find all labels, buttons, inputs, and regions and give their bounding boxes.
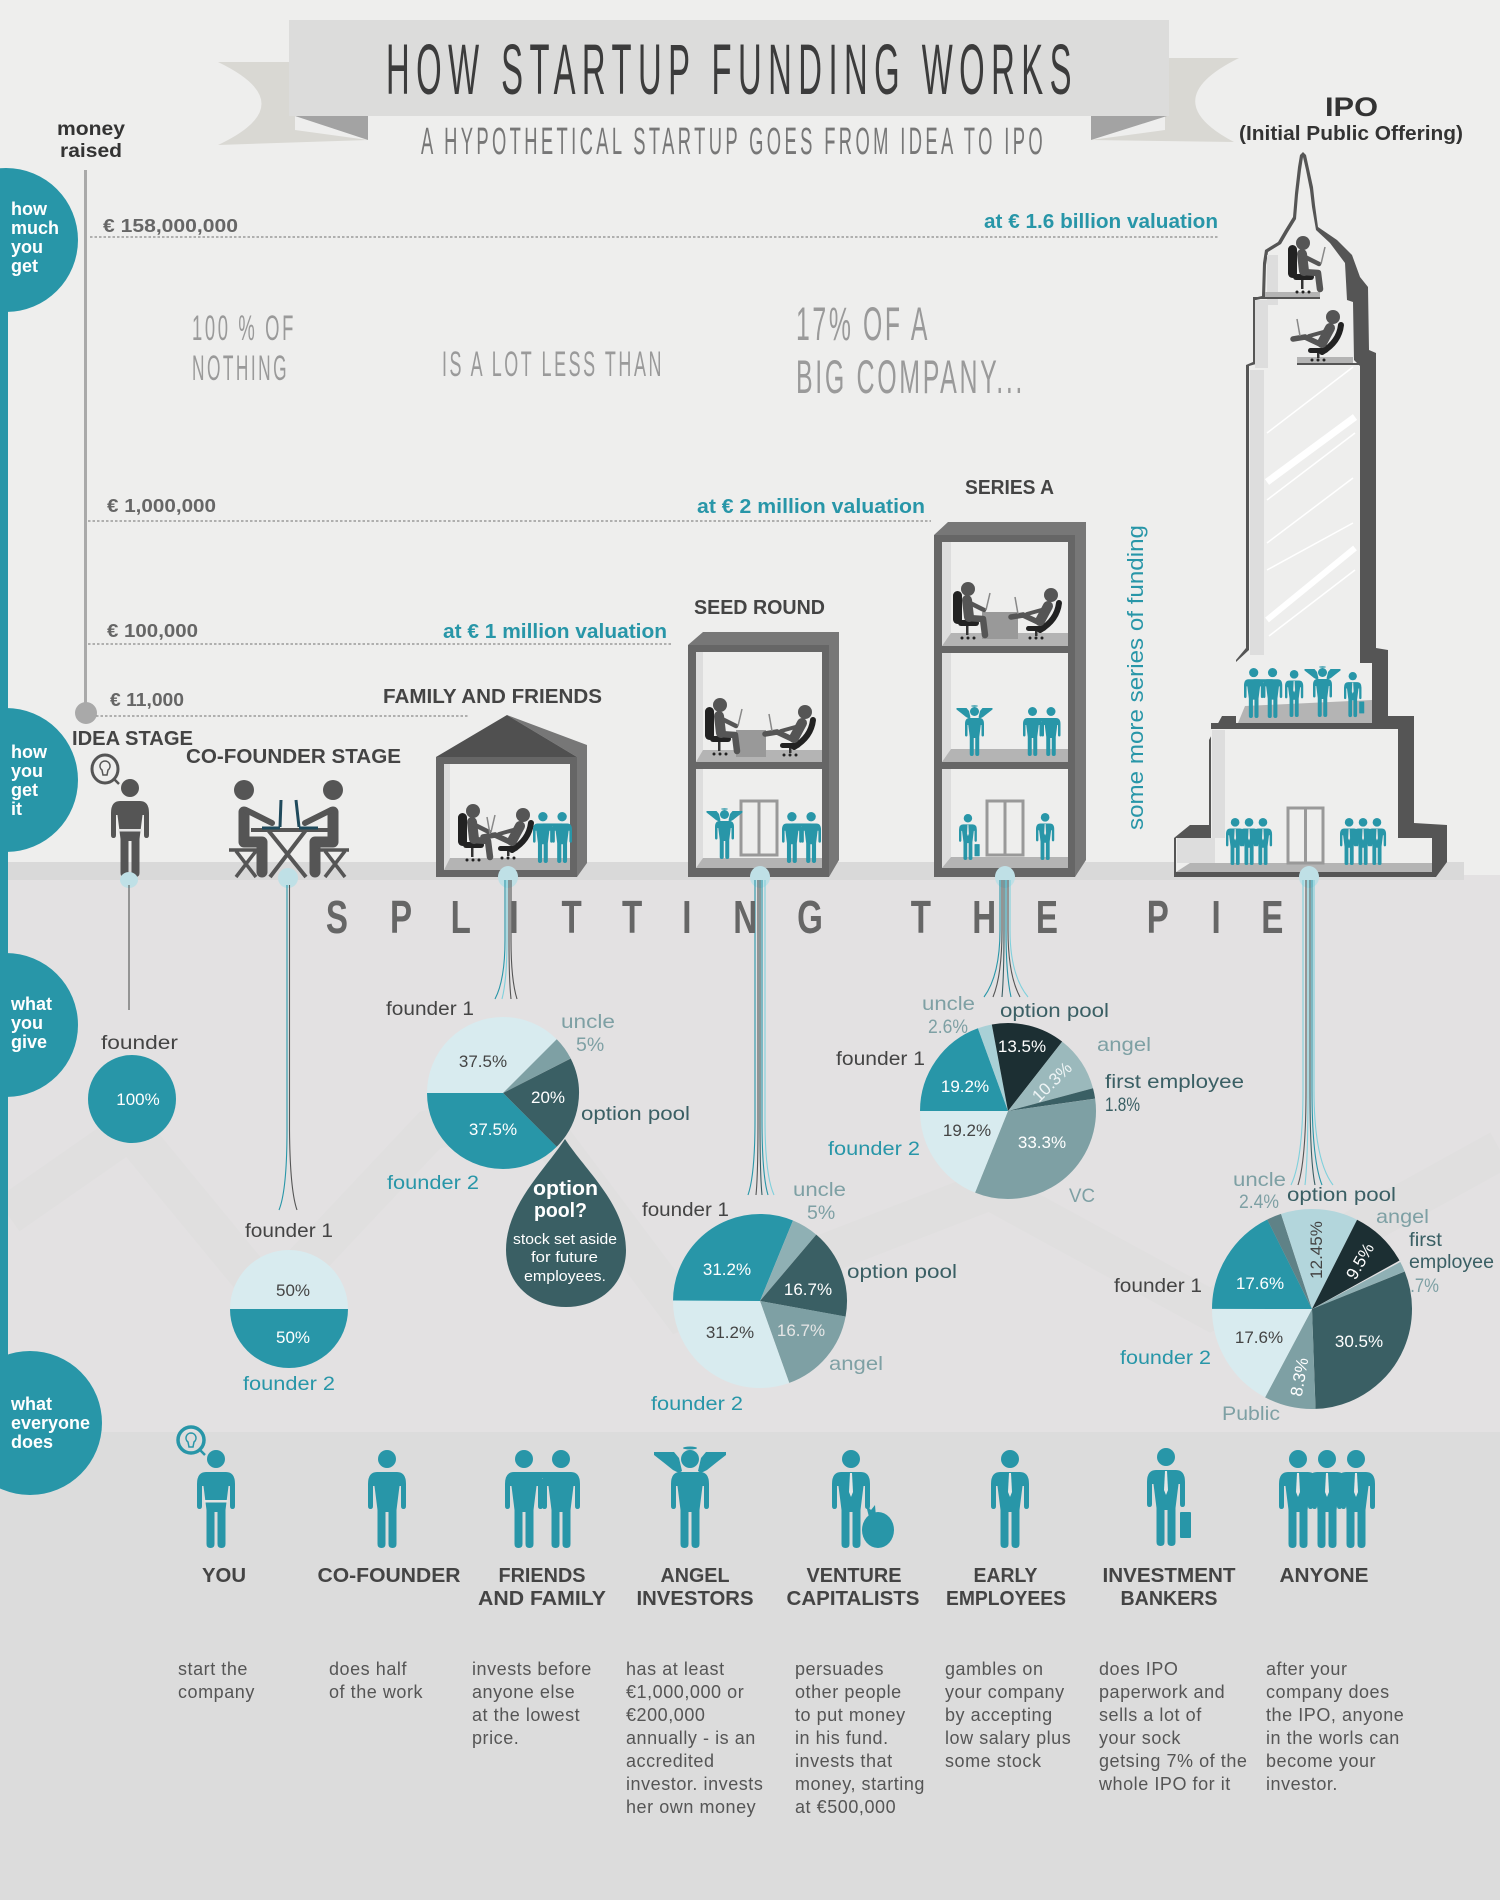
- cast: anyone: company does: [1266, 1682, 1390, 1702]
- pie: family and friends round: 37.5%: [469, 1120, 517, 1139]
- quote: 100% of nothing: 100 % OF: [192, 309, 296, 348]
- pie: seed round: 31.2%: [706, 1323, 754, 1342]
- cast: you: YOU: [202, 1565, 246, 1587]
- side tab: what everyone does: does: [11, 1432, 53, 1452]
- icon: crowd left: [1226, 818, 1272, 865]
- side tab: how much you get: you: [11, 237, 43, 257]
- ground band: [8, 862, 1464, 880]
- pie: IPO: option pool: [1287, 1184, 1396, 1206]
- stage label: SERIES A: [965, 477, 1054, 499]
- pie: series A: angel: [1097, 1034, 1151, 1056]
- side tab: how you get it: it: [11, 799, 22, 819]
- banner left fold: [295, 116, 368, 140]
- connector: family and friends: [495, 866, 518, 999]
- cast: anyone: investor.: [1266, 1774, 1338, 1794]
- cast: venture capitalists: money, starting: [795, 1774, 925, 1794]
- cast: co-founder: [318, 1450, 461, 1702]
- side tab: what everyone does: everyone: [11, 1413, 90, 1433]
- icon: friends pair: [1023, 707, 1060, 756]
- side tab: how you get it: you: [11, 761, 43, 781]
- icon: angel: [956, 705, 992, 756]
- cast: venture capitalists: to put money: [795, 1705, 906, 1725]
- tower glass reflections: [1267, 367, 1355, 636]
- icon: crowd right: [1340, 818, 1386, 865]
- pie: series A: 19.2%: [941, 1077, 989, 1096]
- background: bottom section: [0, 1432, 1500, 1900]
- cast: early employees: some stock: [945, 1751, 1042, 1771]
- icon: reclined second floor: [1293, 310, 1341, 362]
- cast: investment bankers: sells a lot of: [1099, 1705, 1202, 1725]
- icon: banker with briefcase: [1147, 1448, 1191, 1546]
- cast: angel investors: investor. invests: [626, 1774, 763, 1794]
- desk: [982, 612, 1018, 639]
- pie: seed round: 31.2%: [703, 1260, 751, 1279]
- pie: seed round: uncle: [793, 1179, 846, 1201]
- icon: banker: [959, 814, 980, 860]
- pie: family and friends round: founder 2: [387, 1172, 479, 1194]
- icon: employee: [1036, 813, 1054, 860]
- icon: thought bubble: [92, 755, 119, 784]
- cast: investment bankers: BANKERS: [1120, 1588, 1218, 1610]
- callout: option pool definition: stock set aside: [513, 1232, 617, 1248]
- cast: early employees: gambles on: [945, 1659, 1044, 1679]
- cast: early employees: EMPLOYEES: [946, 1588, 1066, 1610]
- cast: friends and family: [472, 1450, 607, 1748]
- desk: [736, 730, 766, 757]
- pie: IPO: uncle: [1233, 1169, 1286, 1191]
- background: lower section: [0, 875, 1500, 1435]
- side tab: what you give: you: [11, 1013, 43, 1033]
- side tab: what you give: what: [10, 994, 52, 1014]
- callout: option pool definition: pool?: [534, 1200, 587, 1222]
- icon: friends pair: [533, 812, 572, 863]
- quote: is a lot less than: IS A LOT LESS THAN: [442, 345, 664, 384]
- building: series A: [934, 477, 1086, 877]
- icon: you figure: [197, 1450, 235, 1548]
- side tab: how much you get: much: [11, 218, 59, 238]
- cast: anyone: become your: [1266, 1751, 1376, 1771]
- pie: series A: 10.3%: [1028, 1058, 1076, 1106]
- pie: seed round: founder 2: [651, 1393, 743, 1415]
- cast: angel investors: €1,000,000 or: [626, 1682, 744, 1702]
- banner left tail: [218, 62, 368, 145]
- pie: seed round: 16.7%: [784, 1280, 832, 1299]
- stage label: CO-FOUNDER STAGE: [186, 746, 401, 768]
- cast: angel investors: ANGEL: [660, 1565, 730, 1587]
- cast: venture capitalists: invests that: [795, 1751, 893, 1771]
- funding level: 100 thousand: € 100,000: [107, 621, 198, 641]
- pie: IPO: 1.7%: [1401, 1275, 1439, 1297]
- funding level: 1 million: [88, 496, 931, 521]
- icon: thought bubble: [178, 1427, 205, 1455]
- icon: two founders at table: [229, 780, 349, 877]
- cast: anyone: the IPO, anyone: [1266, 1705, 1404, 1725]
- cast: venture capitalists: [786, 1450, 925, 1817]
- cast: angel investors: annually - is an: [626, 1728, 756, 1748]
- tower floors: [1176, 292, 1432, 872]
- pie: co-founder split: 50%: [276, 1281, 310, 1300]
- cast: angel investors: has at least: [626, 1659, 725, 1679]
- pie: co-founder split: founder 2: [243, 1373, 335, 1395]
- stage: idea: [72, 728, 193, 877]
- cast: investment bankers: does IPO: [1099, 1659, 1178, 1679]
- pie: founder 100%: 100%: [116, 1090, 160, 1109]
- quote: 17% of a big company: BIG COMPANY...: [796, 350, 1025, 403]
- cast: venture capitalists: VENTURE: [806, 1565, 902, 1587]
- cast: co-founder: of the work: [329, 1682, 424, 1702]
- cast: anyone: ANYONE: [1280, 1565, 1368, 1587]
- connector: series A: [984, 866, 1028, 997]
- quote: 100% of nothing: [192, 309, 296, 388]
- side tab: what everyone does: [0, 1351, 102, 1495]
- pie: IPO: founder 2: [1120, 1347, 1211, 1369]
- icon: angel: [706, 808, 742, 859]
- connector: founder: [120, 872, 138, 1010]
- pie: family and friends round: 5%: [576, 1034, 604, 1056]
- funding level: 1 million: € 1,000,000: [107, 496, 216, 516]
- pie: series A: founder 1: [836, 1048, 925, 1070]
- icon: co-founder figure: [368, 1450, 406, 1548]
- pie: founder 100%: [88, 1032, 179, 1143]
- door: [987, 801, 1023, 855]
- icon: founder figure: [111, 779, 149, 877]
- pie: IPO: 17.6%: [1236, 1274, 1284, 1293]
- quote: 17% of a big company: 17% OF A: [796, 297, 930, 350]
- banner ribbon: [289, 20, 1169, 116]
- cast: you: start the: [178, 1659, 248, 1679]
- cast: friends and family: at the lowest: [472, 1705, 580, 1725]
- stage label: SEED ROUND: [694, 597, 825, 619]
- cast: investment bankers: INVESTMENT: [1102, 1565, 1236, 1587]
- cast: investment bankers: whole IPO for it: [1098, 1774, 1231, 1794]
- cast: friends and family: price.: [472, 1728, 519, 1748]
- side tab: how you get it: how: [11, 742, 48, 762]
- left teal spine: [0, 240, 8, 1430]
- cast: anyone: in the worls can: [1266, 1728, 1400, 1748]
- connector: seed round: [748, 866, 774, 1195]
- cast: angel investors: her own money: [626, 1797, 756, 1817]
- banner right tail: [1091, 58, 1239, 142]
- building shell: [688, 632, 839, 877]
- pie: IPO: Public: [1222, 1403, 1280, 1425]
- pie: IPO: 12.45%: [1307, 1221, 1326, 1279]
- cast: friends and family: invests before: [472, 1659, 592, 1679]
- door: [1288, 808, 1323, 863]
- side tab: how much you get: [0, 168, 78, 312]
- title banner: [218, 20, 1239, 145]
- tower shading: [1177, 255, 1278, 863]
- icon: seated top floor: [1288, 236, 1325, 294]
- callout: option pool definition: [506, 1139, 626, 1307]
- building: seed round: [688, 597, 839, 877]
- cast: you: [178, 1427, 255, 1702]
- cast: investment bankers: getsing 7% of the: [1099, 1751, 1247, 1771]
- pie: series A: option pool: [1000, 1000, 1109, 1022]
- icon: investors group: [1244, 666, 1364, 718]
- pie: seed round: option pool: [847, 1261, 957, 1283]
- side tab: how you get it: get: [11, 780, 38, 800]
- cast: friends and family: anyone else: [472, 1682, 575, 1702]
- pie: family and friends round: founder 1: [386, 998, 474, 1020]
- icon: VC with money bag: [832, 1450, 894, 1548]
- pie: IPO: founder 1: [1114, 1275, 1202, 1297]
- building shell: [934, 522, 1086, 877]
- icon: angel: [654, 1446, 726, 1548]
- pie: co-founder split: [230, 1220, 348, 1395]
- side tab: how you get it: [0, 708, 78, 852]
- pie: IPO: [1114, 1169, 1494, 1425]
- building: IPO tower: [1174, 92, 1463, 877]
- pie: family and friends round: option pool: [581, 1103, 690, 1125]
- building: family and friends house: [383, 686, 602, 877]
- cast: investment bankers: your sock: [1099, 1728, 1181, 1748]
- cast: angel investors: €200,000: [626, 1705, 705, 1725]
- funding level: 100 thousand: at € 1 million valuation: [443, 621, 667, 643]
- cast: investment bankers: [1098, 1448, 1247, 1794]
- pie: family and friends round: [386, 998, 690, 1194]
- cast: venture capitalists: at €500,000: [795, 1797, 896, 1817]
- side tab: what everyone does: what: [10, 1394, 52, 1414]
- door: [741, 801, 777, 855]
- callout: option pool definition: for future: [531, 1250, 598, 1266]
- cast: friends and family: FRIENDS: [498, 1565, 586, 1587]
- icon: friends pair: [782, 812, 821, 863]
- pie: IPO: 17.6%: [1235, 1328, 1283, 1347]
- cast: anyone: [1266, 1450, 1404, 1794]
- cast: venture capitalists: in his fund.: [795, 1728, 889, 1748]
- side tab: how much you get: how: [11, 199, 48, 219]
- pie: IPO: angel: [1376, 1206, 1429, 1228]
- pie: series A: 19.2%: [943, 1121, 991, 1140]
- cast: angel investors: INVESTORS: [636, 1588, 754, 1610]
- pie: seed round: [642, 1179, 957, 1415]
- pie: IPO: first: [1409, 1229, 1443, 1251]
- cast: co-founder: CO-FOUNDER: [318, 1565, 461, 1587]
- banner right fold: [1091, 116, 1167, 140]
- funding level: 158 million: at € 1.6 billion valuation: [984, 211, 1218, 233]
- icon: friends pair: [505, 1450, 580, 1548]
- pie: family and friends round: 20%: [531, 1088, 565, 1107]
- pie: series A: first employee: [1105, 1071, 1244, 1093]
- house roof: [436, 715, 577, 757]
- pie: series A: 1.8%: [1105, 1094, 1140, 1116]
- icon: employee: [991, 1450, 1029, 1548]
- pie: series A: 33.3%: [1018, 1133, 1066, 1152]
- cast: early employees: EARLY: [974, 1565, 1038, 1587]
- cast: co-founder: does half: [329, 1659, 407, 1679]
- money raised axis: raised: [60, 141, 122, 162]
- vertical label: some more series of funding: some more series of funding: [1123, 525, 1148, 830]
- tower interior: [1236, 157, 1372, 723]
- cast: angel investors: [626, 1446, 763, 1817]
- callout: option pool definition: option: [533, 1178, 598, 1200]
- cast: you: company: [178, 1682, 255, 1702]
- tower heading: (Initial Public Offering): [1239, 123, 1463, 145]
- icon: seated people: [458, 804, 531, 862]
- pie: seed round: angel: [829, 1353, 883, 1375]
- pie: co-founder split: 50%: [276, 1328, 310, 1347]
- pie: family and friends round: 37.5%: [459, 1052, 507, 1071]
- pie: series A: founder 2: [828, 1138, 920, 1160]
- house frame: [436, 757, 577, 877]
- icon: crowd: [1279, 1450, 1375, 1548]
- connector: IPO: [1291, 866, 1333, 1185]
- cast: venture capitalists: persuades: [795, 1659, 884, 1679]
- tower heading: IPO: [1325, 92, 1378, 122]
- pie: series A: uncle: [922, 993, 975, 1015]
- cast: early employees: [945, 1450, 1071, 1771]
- funding level: 158 million: [90, 211, 1218, 237]
- pie: co-founder split: founder 1: [245, 1220, 333, 1242]
- background: upper section: [0, 0, 1500, 880]
- funding level: 1 million: at € 2 million valuation: [697, 496, 925, 518]
- pie: seed round: 5%: [807, 1202, 835, 1224]
- pie: seed round: 16.7%: [777, 1321, 825, 1340]
- cast: anyone: after your: [1266, 1659, 1348, 1679]
- house side wall: [507, 715, 587, 877]
- axis heading: money: [57, 119, 125, 140]
- stage: co-founder: [186, 746, 401, 877]
- stage label: FAMILY AND FRIENDS: [383, 686, 602, 708]
- tower heading: [1239, 92, 1463, 145]
- pie: IPO: 2.4%: [1239, 1191, 1279, 1213]
- quote: 100% of nothing: NOTHING: [192, 349, 289, 388]
- cast: venture capitalists: CAPITALISTS: [786, 1588, 920, 1610]
- cast: venture capitalists: other people: [795, 1682, 902, 1702]
- funding level: 158 million: € 158,000,000: [103, 216, 238, 236]
- icon: seated people: [705, 698, 813, 756]
- funding level: 100 thousand: [88, 621, 671, 644]
- callout: option pool definition: employees.: [524, 1269, 606, 1285]
- cast: angel investors: accredited: [626, 1751, 715, 1771]
- money raised axis: [57, 119, 125, 724]
- pie: IPO: 8.3%: [1287, 1356, 1312, 1398]
- pie: series A: VC: [1069, 1185, 1095, 1207]
- cast: investment bankers: paperwork and: [1099, 1682, 1225, 1702]
- pie: founder 100%: founder: [101, 1032, 179, 1054]
- axis dot: [75, 702, 97, 724]
- pie: IPO: 9.5%: [1342, 1240, 1378, 1283]
- pie: series A: [828, 993, 1244, 1207]
- cast: early employees: your company: [945, 1682, 1065, 1702]
- side tab: how much you get: get: [11, 256, 38, 276]
- pie: seed round: founder 1: [642, 1199, 729, 1221]
- cast: early employees: by accepting: [945, 1705, 1053, 1725]
- side tab: what you give: [0, 953, 78, 1097]
- section heading: splitting the pie: SPLITTINGTHEPIE: [326, 893, 1283, 943]
- cast: friends and family: AND FAMILY: [478, 1588, 607, 1610]
- pie: series A: 2.6%: [928, 1016, 968, 1038]
- pie: IPO: employee: [1409, 1251, 1494, 1273]
- funding level: 11 thousand: € 11,000: [110, 690, 184, 710]
- icon: seated people: [953, 582, 1059, 640]
- cast: early employees: low salary plus: [945, 1728, 1071, 1748]
- stage label: IDEA STAGE: [72, 728, 193, 750]
- quote: 17% of a big company: [796, 297, 1025, 403]
- pie: family and friends round: uncle: [561, 1011, 615, 1033]
- side tab: what you give: give: [11, 1032, 47, 1052]
- tower silhouette: [1174, 152, 1447, 877]
- connector: co-founder: [278, 868, 298, 1210]
- pie: IPO: 30.5%: [1335, 1332, 1383, 1351]
- pie: series A: 13.5%: [998, 1037, 1046, 1056]
